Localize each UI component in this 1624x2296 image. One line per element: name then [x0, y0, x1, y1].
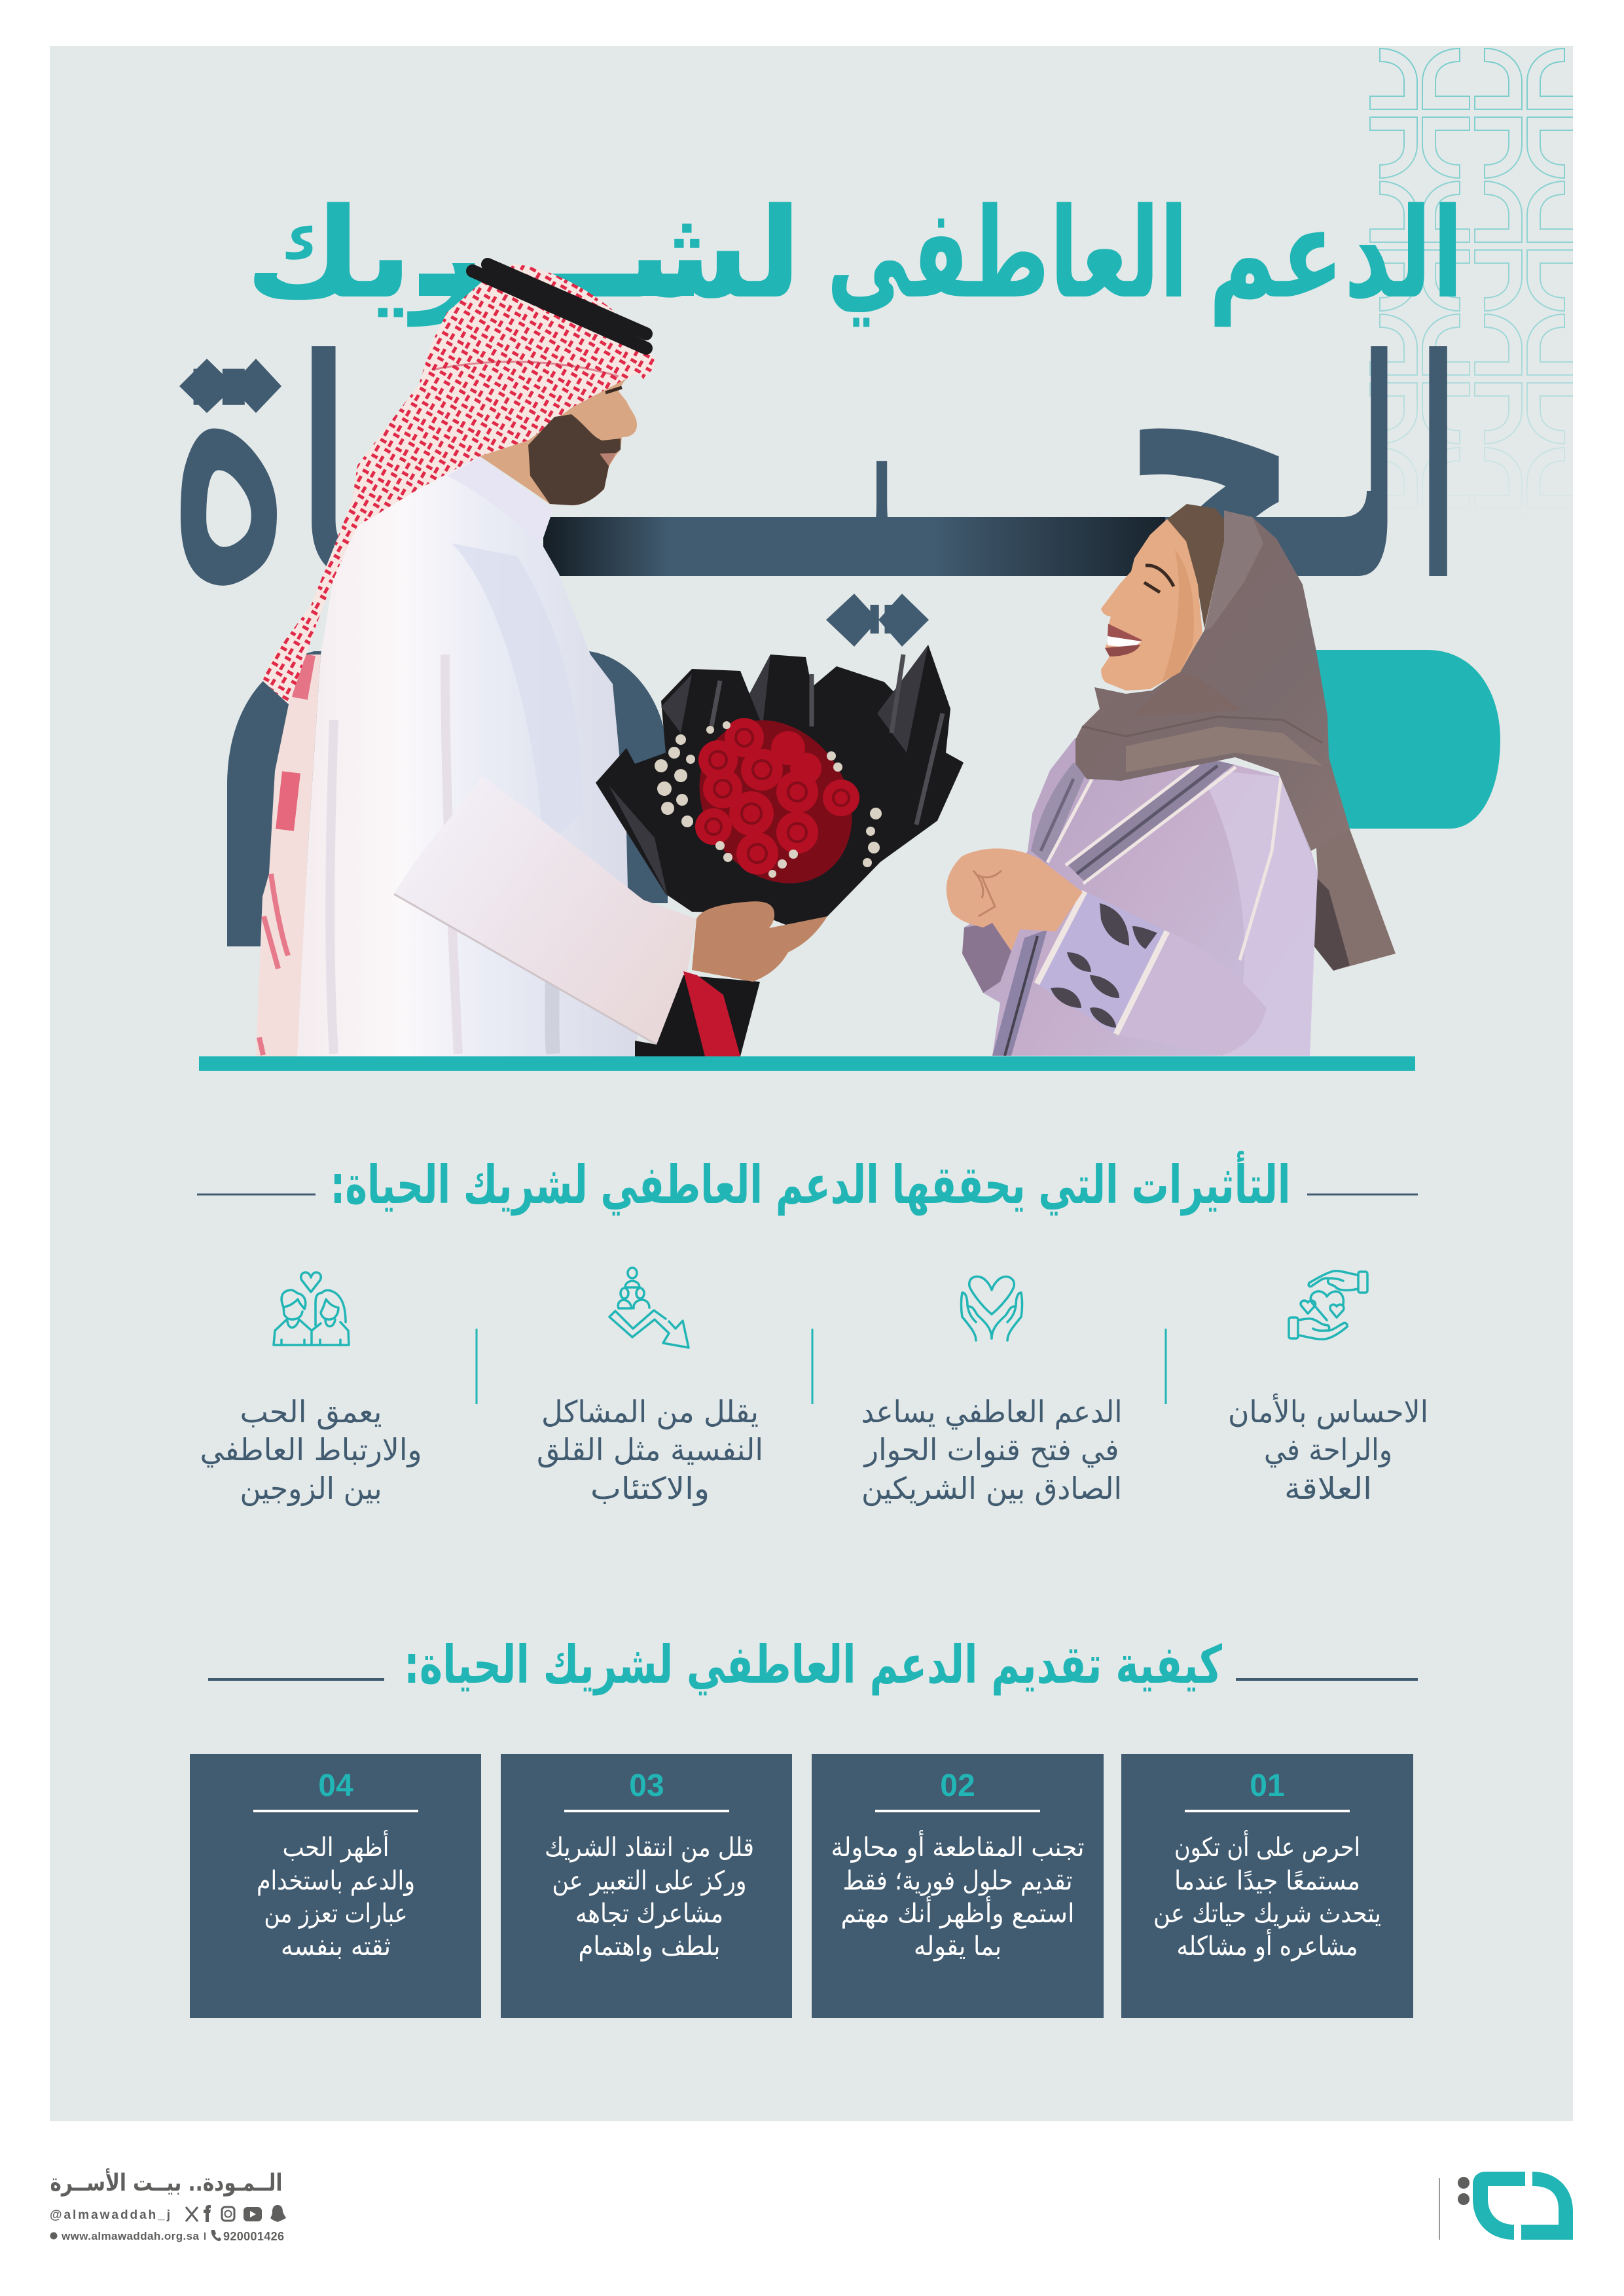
text block: effect 4: يعمق الحب [240, 1394, 382, 1430]
title: main teal heading [245, 181, 1507, 327]
lips [600, 453, 616, 466]
card 03: قلل من انتقاد الشريك [545, 1833, 754, 1863]
photo: woman in abaya [947, 504, 1396, 1056]
beard [528, 414, 621, 505]
text block: effect 2 [861, 1394, 1122, 1507]
icon: hands and hearts [1289, 1271, 1367, 1339]
text block: effect 1: والراحة في [1264, 1432, 1392, 1468]
face [480, 378, 637, 505]
card 02: 02 [940, 1768, 975, 1803]
text block: effect 1: الاحساس بالأمان [1228, 1393, 1428, 1429]
card 02: استمع وأظهر أنك مهتم [840, 1896, 1075, 1929]
card 04 [190, 1754, 481, 2018]
footer: slogan: الــمـودة.. بيــت الأســرة [50, 2168, 283, 2197]
title: large word: ـيـ [828, 211, 937, 669]
abaya body [962, 738, 1318, 1056]
footer: social icons [186, 2205, 286, 2222]
text block: effect 3 [537, 1394, 763, 1507]
collar [447, 457, 553, 543]
front trim [1031, 762, 1087, 864]
baby's breath [655, 721, 882, 878]
card 04: ثقته بنفسه [281, 1931, 391, 1962]
roses [668, 691, 883, 913]
photo: man's hand over bouquet [692, 901, 827, 982]
icon: heart in hands [961, 1276, 1022, 1340]
footer: website: www.almawaddah.org.sa [61, 2230, 200, 2242]
face [1101, 519, 1202, 691]
decorative pattern: top right [1369, 48, 1573, 501]
text block: effect 3: يقلل من المشاكل [541, 1394, 759, 1430]
card 04: والدعم باستخدام [257, 1866, 415, 1896]
icon: decreasing issues arrow [609, 1268, 689, 1348]
text block: effect 2: في فتح قنوات الحوار [863, 1432, 1119, 1468]
title: large word [167, 211, 1466, 669]
thobe body [297, 457, 696, 1056]
thobe folds [452, 543, 583, 851]
inner sleeve [962, 923, 1011, 993]
hijab front panel [1204, 511, 1263, 630]
card 03: بلطف واهتمام [579, 1931, 720, 1962]
sleeve [394, 776, 696, 1045]
footer: social handle: @almawaddah_j [50, 2208, 170, 2222]
card 02: تجنب المقاطعة أو محاولة [831, 1830, 1084, 1863]
icon: couple with heart [274, 1272, 349, 1345]
teal divider bar [199, 1056, 1415, 1071]
photo: bouquet stem and ribbon [635, 971, 760, 1056]
title: main teal heading: لشـــريك [245, 181, 803, 327]
hands [947, 848, 1083, 951]
photo: man with shemagh [256, 264, 696, 1056]
text block: effect 2: الصادق بين الشريكين [861, 1471, 1122, 1507]
card 01 [1121, 1754, 1413, 2018]
title: large word: ا [1410, 295, 1466, 647]
card 03: وركز على التعبير عن [552, 1866, 746, 1896]
card 01: احرص على أن تكون [1174, 1830, 1360, 1863]
title: large word: ة [167, 213, 291, 662]
column dividers [477, 1329, 1166, 1404]
title: large word: حـ [1024, 238, 1303, 662]
title: main teal heading: العاطفي [827, 181, 1188, 327]
mouth [1108, 624, 1142, 643]
agal [473, 264, 646, 348]
logo shape: teal block [1309, 650, 1500, 829]
logo: brand mark [1439, 2172, 1573, 2240]
text block: effect 3: والاكتئاب [590, 1471, 710, 1507]
shemagh fold [432, 362, 619, 376]
lower trim [992, 929, 1047, 1056]
shemagh strap [262, 264, 655, 704]
hijab folds [1132, 671, 1244, 717]
text block: effect 4 [200, 1394, 422, 1507]
title: large word: لـ [1292, 295, 1405, 647]
hijab main [1075, 511, 1350, 851]
footer: phone: 920001426 [223, 2230, 284, 2243]
title: large word: ـا [287, 295, 450, 647]
brow and eye [1144, 565, 1174, 592]
card 03: مشاعرك تجاهه [575, 1899, 723, 1929]
card 04: أظهر الحب [283, 1830, 389, 1863]
text block: effect 3: النفسية مثل القلق [537, 1432, 763, 1468]
card 04: عبارات تعزز من [264, 1899, 407, 1929]
eye [605, 387, 622, 393]
light sleeve sheen [1198, 769, 1318, 1056]
lower sleeve puff [1116, 931, 1267, 1056]
card 03: 03 [629, 1768, 664, 1803]
card 02: بما يقوله [914, 1931, 1001, 1962]
section 2 heading: كيفية تقديم الدعم العاطفي لشريك الحياة: [404, 1634, 1222, 1696]
text block: effect 4: والارتباط العاطفي [200, 1432, 422, 1468]
card 01: يتحدث شريك حياتك عن [1153, 1899, 1381, 1929]
shemagh tail [256, 655, 321, 1056]
text block: effect 1 [1228, 1393, 1428, 1506]
logo shape: dark arch [227, 651, 668, 946]
card 02 [812, 1754, 1104, 2018]
card 02: تقديم حلول فورية؛ فقط [843, 1866, 1072, 1896]
photo: bouquet [596, 645, 964, 929]
card 03 [501, 1754, 792, 2018]
card 04: 04 [318, 1768, 353, 1803]
text block: effect 2: الدعم العاطفي يساعد [861, 1394, 1122, 1430]
card 01: 01 [1250, 1768, 1285, 1803]
card 01: مستمعًا جيدًا عندما [1174, 1866, 1360, 1896]
scarf tail [1311, 753, 1396, 971]
title: main teal heading: الدعم [1208, 181, 1464, 327]
hair [1167, 504, 1224, 628]
cuff with embroidery [1037, 891, 1167, 1034]
card 01: مشاعره أو مشاكله [1177, 1929, 1358, 1962]
text block: effect 4: بين الزوجين [240, 1471, 382, 1507]
text block: effect 1: العلاقة [1284, 1471, 1372, 1506]
